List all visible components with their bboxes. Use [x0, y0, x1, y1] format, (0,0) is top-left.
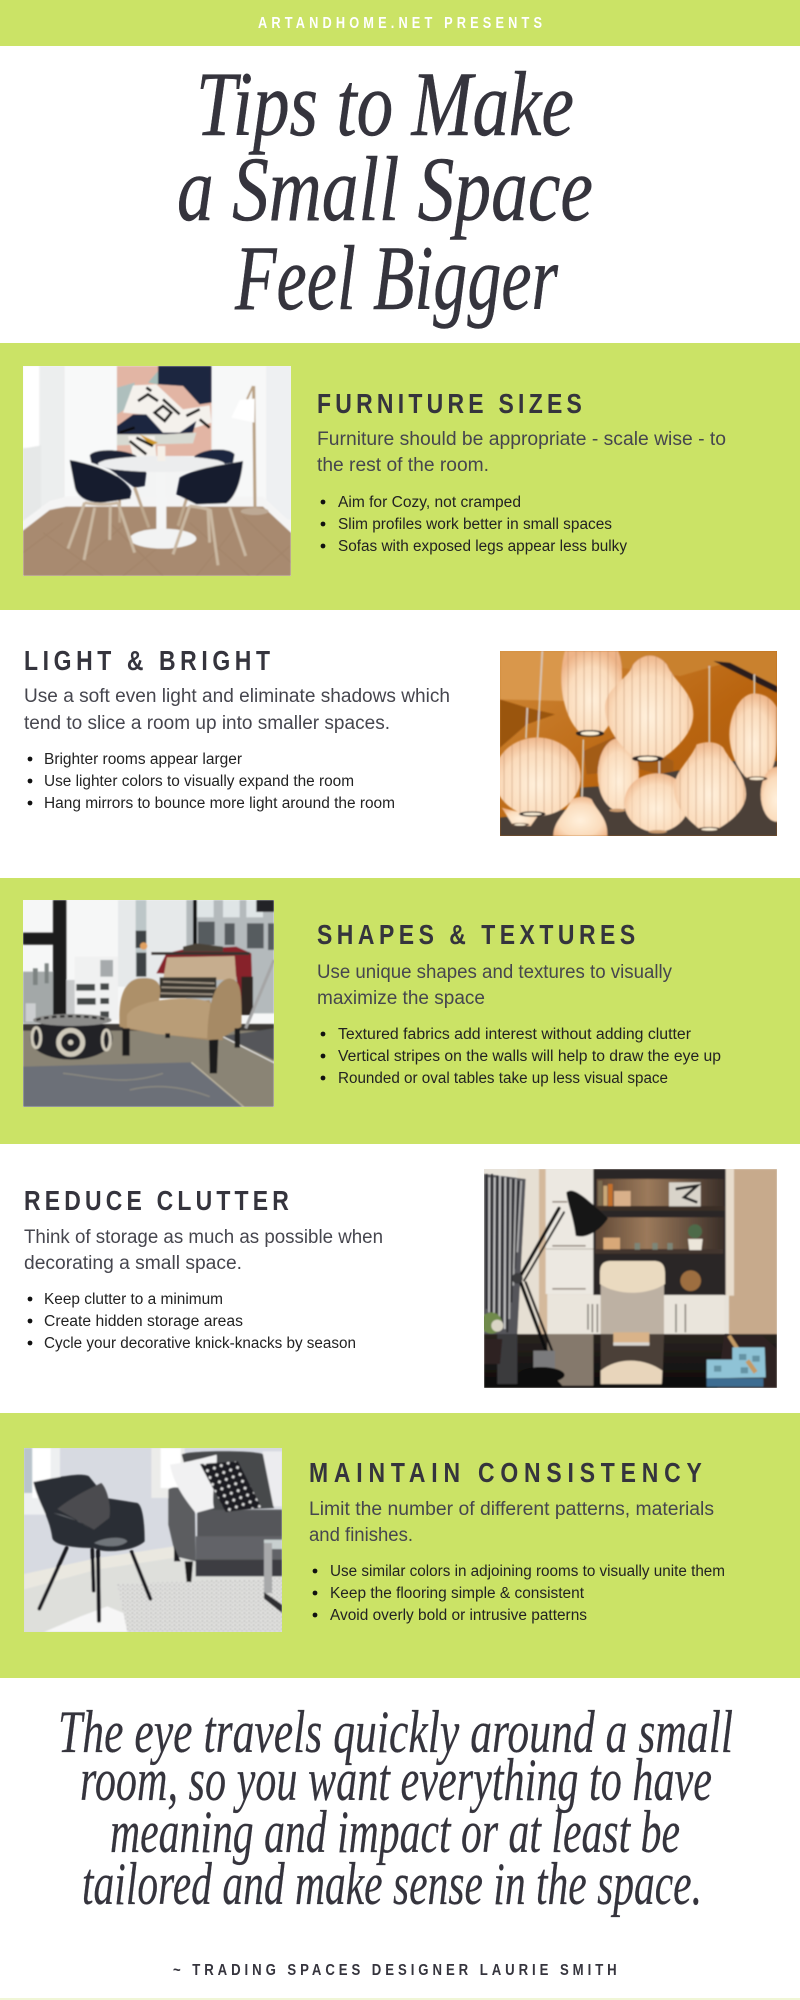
- bullet list: Rounded or oval tables take up less visual space: [338, 1070, 668, 1087]
- shelving: [593, 1169, 728, 1295]
- chair: [33, 1475, 145, 1551]
- bullet list: Keep clutter to a minimum: [44, 1291, 223, 1308]
- desk: [484, 1334, 777, 1388]
- paragraph: [317, 962, 672, 1009]
- paragraph: maximize the space: [317, 988, 485, 1009]
- back chairs: [90, 450, 146, 488]
- bullet list: Brighter rooms appear larger: [44, 751, 242, 768]
- city view: [23, 972, 55, 1023]
- blue desk organizer: [729, 1336, 744, 1359]
- quote attribution: ~ TRADING SPACES DESIGNER LAURIE SMITH: [173, 1962, 617, 1979]
- paragraph: Think of storage as much as possible when: [24, 1227, 383, 1248]
- heading: shapes and textures: SHAPES & TEXTURES: [317, 920, 635, 951]
- paragraph: tend to slice a room up into smaller spaces.: [24, 713, 390, 734]
- lantern shapes: [494, 651, 793, 836]
- heading: light and bright: LIGHT & BRIGHT: [24, 646, 270, 677]
- chair: [601, 1284, 664, 1334]
- heading: maintain consistency: MAINTAIN CONSISTENCY: [309, 1458, 702, 1489]
- buildings: [75, 957, 118, 1020]
- paragraph: Furniture should be appropriate - scale wise - to: [317, 429, 726, 450]
- bullet list: Hang mirrors to bounce more light around the room: [44, 795, 395, 812]
- shelf items: [598, 1181, 602, 1206]
- title: Feel Bigger: [234, 227, 559, 329]
- bullet list: [313, 1563, 725, 1624]
- glass table: [264, 1540, 282, 1549]
- desk lamp: [519, 1208, 564, 1354]
- rug: [117, 1578, 282, 1632]
- table: [156, 469, 166, 539]
- decorative grass: [484, 1174, 526, 1334]
- paragraph: Use unique shapes and textures to visually: [317, 962, 672, 983]
- paragraph: Use a soft even light and eliminate shadows which: [24, 686, 450, 707]
- photo: paper lanterns: [494, 651, 793, 836]
- title: a Small Space: [177, 138, 593, 240]
- bullet list: Cycle your decorative knick-knacks by season: [44, 1335, 356, 1352]
- paragraph: the rest of the room.: [317, 455, 489, 476]
- paragraph: and finishes.: [309, 1525, 413, 1546]
- panel: furniture sizes: [0, 343, 800, 610]
- front chairs: [70, 460, 131, 503]
- paragraph: Limit the number of different patterns, materials: [309, 1499, 714, 1520]
- panel: shapes and textures: [0, 878, 800, 1144]
- top banner: [0, 0, 800, 46]
- bullet list: Vertical stripes on the walls will help to draw the eye up: [338, 1048, 721, 1065]
- title: Tips to Make: [196, 53, 574, 155]
- bullet list: Avoid overly bold or intrusive patterns: [330, 1607, 587, 1624]
- pouf: [30, 1017, 113, 1060]
- top banner: ARTANDHOME.NET PRESENTS: [258, 15, 542, 32]
- artwork: [117, 366, 211, 456]
- bullet list: Sofas with exposed legs appear less bulky: [338, 538, 627, 555]
- blanket and rail: [156, 947, 253, 1015]
- floor lamp: [254, 386, 255, 509]
- paragraph: [317, 429, 726, 476]
- bullet list: Use similar colors in adjoining rooms to visually unite them: [330, 1563, 725, 1580]
- bullet list: Keep the flooring simple & consistent: [330, 1585, 585, 1602]
- plant: [481, 1312, 502, 1334]
- title: [177, 53, 593, 329]
- bullet list: [321, 494, 627, 555]
- photo: home office desk with lamp: [481, 1169, 777, 1388]
- quote: [58, 1699, 733, 1917]
- window frame: [53, 900, 66, 1015]
- heading: reduce clutter: REDUCE CLUTTER: [24, 1186, 289, 1217]
- bullet list: Slim profiles work better in small spaces: [338, 516, 612, 533]
- bullet list: [28, 1291, 356, 1352]
- photo: armchair and pouf by window: [23, 900, 274, 1107]
- panel: maintain consistency: [0, 1413, 800, 1678]
- bullet list: [321, 1026, 721, 1087]
- bullet list: Use lighter colors to visually expand the room: [44, 773, 354, 790]
- panel: light and bright: [0, 610, 800, 878]
- floor and rug: [23, 1031, 274, 1107]
- photo: dining table with black chairs: [23, 366, 291, 576]
- sofa: [182, 1451, 274, 1511]
- photo: leather chair and grey sofa: [24, 1448, 282, 1632]
- paragraph: [24, 686, 450, 734]
- armchair: [163, 956, 236, 980]
- lower cabinets: [547, 1295, 724, 1334]
- bullet list: Create hidden storage areas: [44, 1313, 243, 1330]
- paragraph: [309, 1499, 714, 1546]
- paragraph: decorating a small space.: [24, 1253, 242, 1274]
- bullet list: [28, 751, 395, 812]
- bullet list: Textured fabrics add interest without adding clutter: [338, 1026, 691, 1043]
- bullet list: Aim for Cozy, not cramped: [338, 494, 521, 511]
- panel: reduce clutter: [0, 1144, 800, 1413]
- heading: furniture sizes: FURNITURE SIZES: [317, 389, 582, 420]
- paragraph: [24, 1227, 383, 1274]
